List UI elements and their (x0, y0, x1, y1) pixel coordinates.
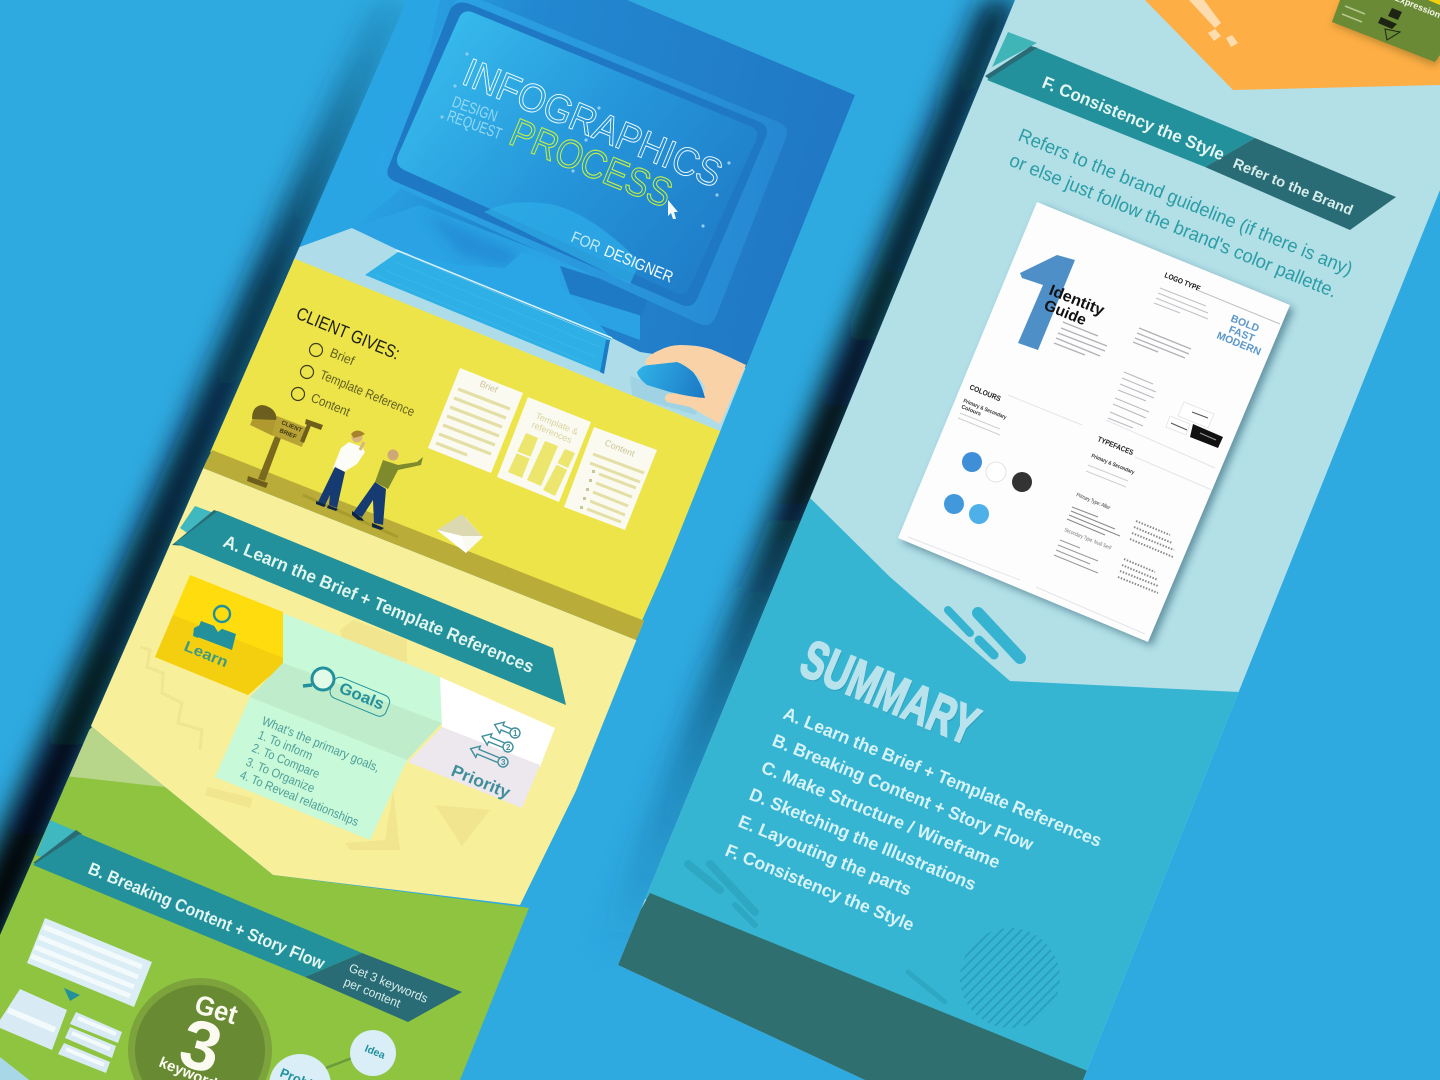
alphabet samples (1118, 521, 1174, 593)
summary list (722, 703, 1105, 935)
flow diagram: source text block (27, 918, 152, 1007)
title: INFOGRAPHICS: INFOGRAPHICS (457, 51, 729, 196)
icon: envelope (437, 514, 483, 553)
pale green wedge (60, 727, 165, 800)
screen sparkle dots (440, 52, 731, 228)
banner F tag (1205, 138, 1396, 230)
light blue corner (0, 1053, 33, 1080)
identity guide title: Guide (1042, 297, 1089, 329)
typefaces section: Primary & Secondary (1090, 453, 1136, 476)
banner B tag (305, 953, 462, 1022)
panel: orange previous section (1145, 0, 1440, 90)
banner F tag text: Refer to the Brand (1230, 156, 1355, 219)
banner B (33, 834, 362, 977)
colours section (944, 383, 1082, 524)
decorative faint shapes (205, 620, 490, 850)
summary heading: SUMMARY (793, 631, 988, 759)
footer dark strip (610, 893, 1100, 1080)
summary list: F. Consistency the Style (722, 840, 917, 935)
icon: down arrow (64, 988, 80, 1001)
icon: ranked arrows: 3 (501, 758, 506, 767)
connector line (326, 1058, 352, 1068)
icon: keyboard (365, 250, 612, 374)
body text: Refers to the brand guideline (if there is any) (1015, 125, 1355, 280)
banner B tag text: per content (342, 975, 403, 1011)
fold corner A (172, 506, 222, 546)
goals list (238, 714, 382, 829)
panel: green section B (0, 727, 530, 1080)
typefaces section: Secondary Type: Nudi Serif (1063, 527, 1112, 552)
priority label: Priority (448, 761, 514, 803)
goals list: What's the primary goals, (260, 714, 382, 775)
icon: magnifier (303, 668, 334, 690)
bold fast modern (1215, 313, 1263, 358)
decorative pills (948, 610, 1020, 658)
icon: ranked arrows: 2 (506, 743, 511, 752)
document: brief (428, 368, 523, 473)
checklist labels: Content (309, 390, 353, 420)
panel: brand identity guide sheet (898, 202, 1290, 642)
bold fast modern: MODERN (1215, 330, 1263, 358)
decorative hatched circle (960, 928, 1060, 1028)
goals block (215, 613, 442, 840)
body text: or else just follow the brand's color pallette. (1006, 150, 1340, 303)
monitor screen (397, 11, 757, 294)
panel: yellow client gives section (203, 256, 725, 640)
banner B tag text: Get 3 keywords (347, 961, 430, 1006)
document: brief: Brief (478, 379, 500, 395)
goals list: 4. To Reveal relationships (238, 768, 361, 829)
summary list: B. Breaking Content + Story Flow (769, 730, 1037, 855)
olive card (1332, 0, 1440, 62)
panel: left infographic board (0, 0, 880, 1080)
badge: get 3 keywords (128, 978, 272, 1080)
typefaces section (1054, 435, 1212, 593)
big number one (1018, 255, 1075, 350)
goals list: 3. To Organize (244, 755, 317, 796)
summary list: C. Make Structure / Wireframe (758, 757, 1003, 872)
subtitle: DESIGN REQUEST: DESIGN (450, 94, 500, 126)
brand guide sheet shadow (902, 206, 1294, 646)
summary heading (792, 629, 988, 759)
olive card shadow (1332, 0, 1440, 66)
fold corner F (985, 32, 1038, 80)
goals list: 1. To inform (256, 728, 315, 763)
checklist labels: Template Reference (318, 367, 417, 419)
flow diagram: content blocks (0, 989, 122, 1073)
bold fast modern: BOLD (1229, 313, 1261, 335)
bubble: problem (269, 1054, 332, 1080)
subtitle: DESIGN REQUEST (447, 96, 503, 138)
icon: two people walking (303, 430, 423, 537)
banner A (175, 511, 566, 705)
subtitle: FOR DESIGNER: DESIGNER (601, 243, 675, 287)
panel: right infographic board (600, 0, 1440, 1080)
icon: cursor (668, 200, 678, 219)
checklist labels (312, 348, 414, 416)
summary list: E. Layouting the parts (735, 811, 914, 900)
icon: mailbox: CLIENT (280, 420, 303, 434)
light area left of monitor (302, 48, 430, 240)
monitor frame (374, 0, 787, 325)
panel: summary teal area (610, 488, 1260, 1080)
monitor stand (398, 252, 650, 340)
typefaces section: Primary Type: Allier (1075, 492, 1111, 511)
under monitor area (352, 205, 640, 340)
identity guide title (1042, 282, 1107, 329)
document: sample and references: references (530, 420, 574, 445)
identity guide title: Identity (1047, 282, 1107, 320)
banner F heading: F. Consistency the Style (1039, 72, 1228, 164)
intro paragraph lines (1054, 322, 1191, 358)
colour swatches (944, 452, 1032, 524)
panel: pale yellow section A (60, 468, 650, 905)
goals list: 2. To Compare (250, 741, 322, 781)
summary heading: SUMMARY (792, 629, 987, 757)
banner B heading: B. Breaking Content + Story Flow (85, 858, 328, 974)
bubble: idea: Idea (363, 1043, 387, 1062)
learn label: Learn (181, 638, 230, 671)
colours section: COLOURS (968, 383, 1002, 403)
panel: light blue base (600, 0, 1440, 1080)
checklist (292, 344, 322, 400)
monitor bezel (387, 2, 767, 306)
decorative stripes (688, 864, 945, 1002)
checklist labels: Brief (328, 345, 357, 368)
priority block (408, 677, 555, 808)
subtitle: DESIGN REQUEST: REQUEST (445, 108, 504, 143)
icon: mailbox: BRIEF (278, 428, 297, 441)
bold fast modern: FAST (1227, 324, 1257, 345)
summary list: D. Sketching the Illustrations (746, 784, 979, 895)
badge: get 3 keywords: Get (191, 989, 241, 1030)
sheet footer lines (908, 537, 1145, 634)
colours section: Colours (960, 404, 982, 418)
colours section: Primary & Secondary (962, 398, 1008, 421)
mid paragraph lines (1108, 372, 1156, 428)
summary list: A. Learn the Brief + Template References (780, 703, 1105, 851)
document: content (564, 427, 657, 530)
person one (316, 430, 365, 511)
ground band (203, 450, 645, 640)
subtitle: FOR DESIGNER: FOR (568, 229, 603, 256)
bubble: idea (350, 1030, 396, 1076)
title: PROCESS: PROCESS (504, 111, 678, 216)
icon: ranked arrows: 1 (513, 729, 518, 738)
heading: client gives: CLIENT GIVES: (293, 303, 403, 364)
left board shadow (0, 0, 412, 970)
right board shadow (586, 0, 1020, 990)
logo type heading: LOGO TYPE (1163, 271, 1202, 293)
decorative marks (1189, 0, 1238, 47)
icon: hand on mouse (630, 345, 746, 424)
logo variants (1166, 402, 1223, 448)
icon: handshake (193, 606, 236, 650)
goals label pill (328, 675, 392, 718)
screen glow (484, 202, 640, 284)
banner A heading: A. Learn the Brief + Template References (220, 531, 537, 677)
subtitle: FOR DESIGNER (571, 231, 673, 283)
person two (352, 450, 423, 530)
panel: header blue section (275, 0, 880, 445)
document: sample and references (497, 397, 591, 502)
icon: mailbox (247, 405, 323, 488)
desk surface (275, 228, 760, 445)
document: content: Content (603, 438, 637, 459)
banner F (987, 48, 1255, 167)
fold corner B (33, 820, 82, 866)
under monitor soft shadow (435, 218, 516, 268)
learn block (155, 575, 285, 695)
typefaces section: TYPEFACES (1096, 435, 1135, 457)
icon: ranked arrows (468, 719, 520, 767)
goals label pill: Goals (336, 680, 386, 714)
document: sample and references: Template & (534, 411, 580, 437)
